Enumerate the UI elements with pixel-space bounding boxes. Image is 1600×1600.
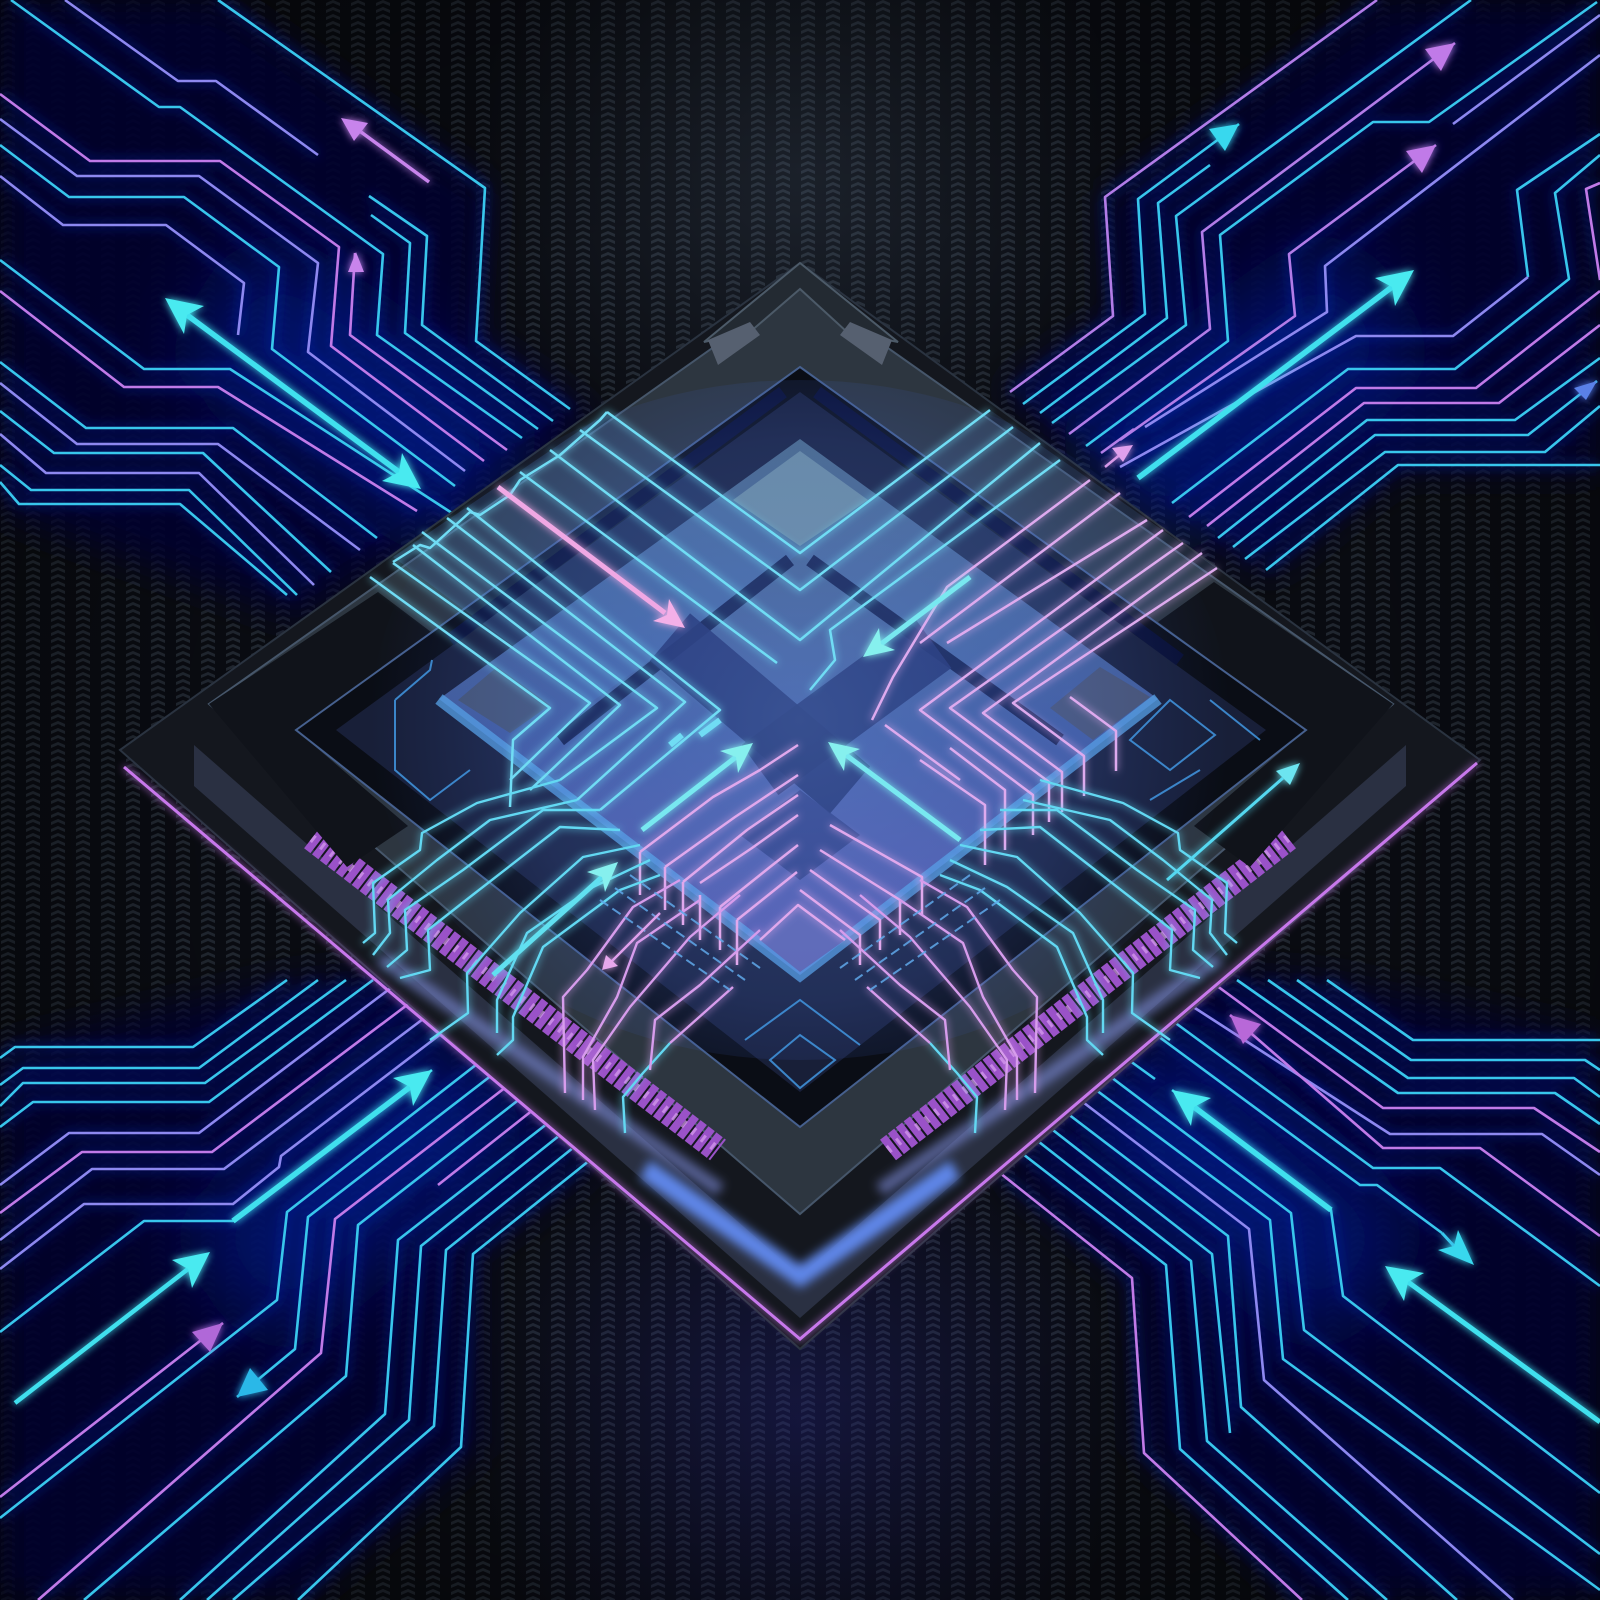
arrow: bottom-right upper: [1172, 1090, 1331, 1210]
die lower dark steps: [740, 790, 860, 880]
circuit traces: bottom-right arm: [1000, 980, 1600, 1600]
die bottom pad: [760, 905, 845, 972]
arrow: purple bottom-left: [192, 1323, 223, 1352]
arrow: bottom-left lower: [15, 1252, 210, 1403]
arrow: cyan lower left: [493, 862, 618, 975]
corner circuitry inside the recess: [395, 660, 1260, 1088]
arrow: purple vertical top-left: [348, 252, 364, 272]
band tint: upper-left: [393, 412, 800, 703]
bright central die: [439, 439, 1158, 975]
arrow: cyan centre right: [828, 742, 960, 840]
circuit traces: top-left arm: [0, 0, 570, 595]
die left pad: [458, 667, 550, 733]
base plate: [120, 263, 1480, 1349]
arrow: top-left double headed: [165, 298, 421, 489]
top corner caps: [704, 263, 898, 342]
chip traces: right skirt: [840, 780, 1237, 1133]
arrow: small blue right edge: [1574, 381, 1597, 400]
recess floor: [336, 392, 1266, 1092]
arrow: small pink lower die: [602, 913, 660, 970]
die top pad: [733, 451, 868, 546]
arrows on chip: [493, 445, 1300, 975]
arrow: small pink upper right: [1105, 445, 1133, 467]
purple band speckle: [312, 838, 1288, 1150]
purple noise bands: [312, 838, 1288, 1150]
grooves across the bands: [450, 392, 1180, 740]
central glow: [370, 380, 1230, 1060]
arrow: purple top-left: [341, 118, 429, 182]
chip traces: lower die chevrons: [640, 745, 922, 965]
arrow: bottom-right small head: [1438, 1230, 1474, 1265]
circuit traces: top-right arm: [1010, 0, 1600, 570]
upper cover: [209, 286, 1393, 1214]
die right pad: [1050, 667, 1150, 740]
die central cross gap: [670, 637, 933, 790]
dark corner panels: [209, 582, 1393, 867]
arrow: cyan centre left: [642, 743, 753, 830]
die thickness: [439, 699, 1158, 975]
blue haze near the chip: [220, 300, 1380, 1290]
top corner highlights: [708, 322, 892, 365]
arrow: cyan right edge: [1167, 763, 1300, 880]
band tint: upper-right: [800, 410, 1217, 703]
arrow: bottom-right lower: [1385, 1266, 1600, 1422]
arrow: purple top-right short: [1406, 145, 1436, 173]
chip: stacked package: [120, 263, 1480, 1349]
chip traces: top V chevrons: [520, 410, 1060, 690]
arrow: top-right large: [1138, 270, 1414, 478]
arrow: purple top-right long: [1425, 43, 1455, 71]
chip traces: right chevrons: [872, 480, 1217, 865]
circuit traces: bottom-left arm: [0, 980, 600, 1600]
recessed ring: [296, 367, 1306, 1127]
chip side wall: [194, 745, 1406, 1318]
arrow: bottom-left large: [233, 1070, 432, 1221]
arrow: blue bottom-left down: [237, 1368, 268, 1397]
arrow: cyan top-right small: [1209, 124, 1239, 151]
arrow: cyan upper right: [863, 577, 970, 657]
lit side strips: [380, 958, 1220, 1190]
arrow: purple bottom-right: [1230, 1015, 1261, 1044]
arrow: pink into die: [498, 487, 685, 628]
lit lower corner: [640, 1160, 960, 1288]
chip traces: left skirt: [363, 780, 760, 1133]
chip traces: left chevrons: [370, 412, 720, 810]
comb circuitry under the die: [600, 875, 1000, 990]
pink base edge: [124, 763, 1477, 1339]
